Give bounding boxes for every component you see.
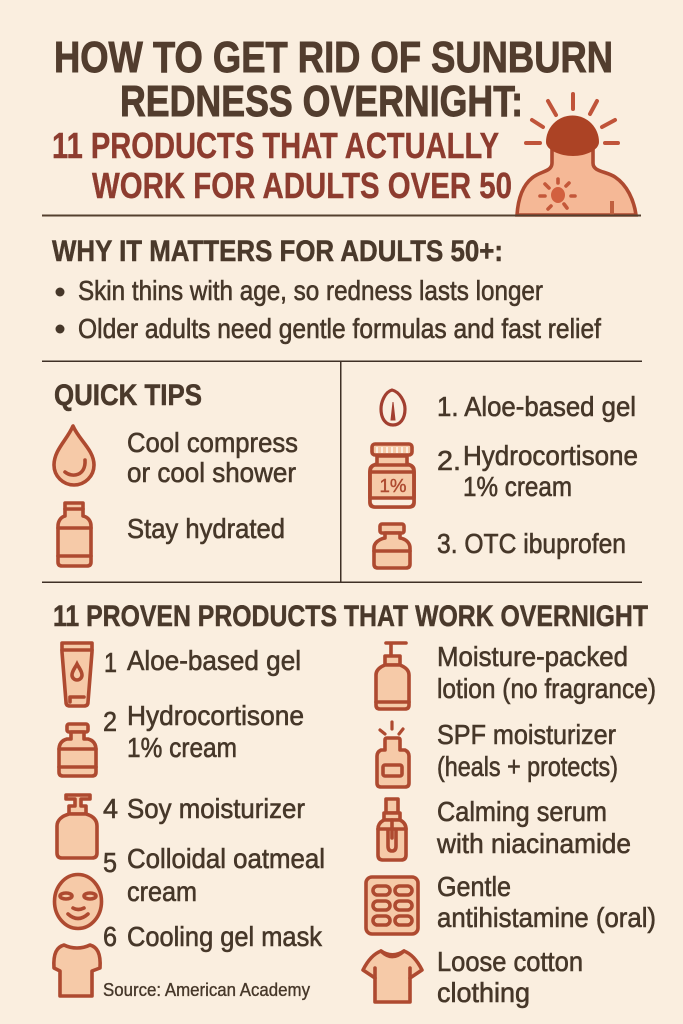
panel: products left column: 1% cream bbox=[127, 732, 237, 763]
panel: products right column: lotion (no fragrance) bbox=[437, 673, 656, 704]
header rule bbox=[42, 214, 641, 216]
panel: quick tips bbox=[54, 379, 298, 566]
panel: products left column: Colloidal oatmeal bbox=[127, 843, 325, 874]
icon: cream jar bbox=[59, 724, 96, 776]
panel: products left column: cream bbox=[127, 876, 197, 907]
icon: water drop bbox=[54, 426, 94, 485]
panel: products right column: Moisture-packed bbox=[437, 641, 628, 672]
panel: products left column: Cooling gel mask bbox=[127, 921, 323, 952]
panel: products right column: (heals + protects) bbox=[437, 751, 618, 782]
panel: products left column: Aloe-based gel bbox=[127, 645, 301, 676]
panel: top three products: 1. Aloe-based gel bbox=[437, 391, 636, 422]
source note: Source: American Academy bbox=[103, 980, 310, 1000]
panel: top three products: 1% cream bbox=[463, 471, 572, 502]
panel: top three products bbox=[370, 390, 638, 568]
panel: products left column: Soy moisturizer bbox=[127, 793, 305, 824]
icon: 1% cream jar: 1% bbox=[380, 476, 406, 496]
panel: top three products: 2. bbox=[437, 445, 461, 476]
icon: aloe tube bbox=[62, 643, 92, 706]
icon: serum bottle bbox=[378, 799, 406, 860]
icon: t-shirt bbox=[54, 945, 100, 996]
panel: products right column: SPF moisturizer bbox=[437, 719, 616, 750]
panel: top three products: Hydrocortisone bbox=[463, 440, 638, 471]
panel: products left column: 5 bbox=[103, 847, 117, 878]
panel: products right column: Loose cotton bbox=[437, 946, 583, 977]
panel: products left column: 2 bbox=[103, 706, 117, 737]
title: REDNESS OVERNIGHT: bbox=[120, 77, 523, 126]
icon: sunburned person bbox=[517, 94, 636, 215]
subtitle: 11 PRODUCTS THAT ACTUALLY bbox=[52, 125, 499, 166]
icon: SPF bottle bbox=[377, 722, 409, 787]
panel: quick tips: or cool shower bbox=[127, 457, 296, 488]
icon: 1% cream jar bbox=[370, 444, 414, 507]
panel: products right column: antihistamine (oral) bbox=[437, 902, 656, 933]
section: why it matters bbox=[52, 235, 601, 344]
panel: products left column: 6 bbox=[103, 921, 117, 952]
icon: aloe leaf bbox=[381, 390, 405, 425]
panel: products right column: clothing bbox=[437, 977, 530, 1008]
icon: blister pack bbox=[366, 877, 418, 934]
panel: products right column: with niacinamide bbox=[436, 828, 631, 859]
icon: water bottle bbox=[58, 503, 91, 566]
panel: products right column: Gentle bbox=[437, 871, 511, 902]
icon: pump bottle bbox=[57, 795, 97, 858]
section: why it matters: Older adults need gentle formulas and fast relief bbox=[78, 313, 601, 344]
subtitle: WORK FOR ADULTS OVER 50 bbox=[92, 165, 512, 206]
panel: top three products: 3. OTC ibuprofen bbox=[437, 528, 626, 559]
panel: quick tips: Stay hydrated bbox=[127, 513, 285, 544]
icon: cotton shirt bbox=[363, 951, 422, 1002]
icon: face mask bbox=[54, 874, 102, 928]
panel: products left column bbox=[54, 643, 325, 1000]
section: why it matters: WHY IT MATTERS FOR ADULTS 50+: bbox=[52, 235, 503, 268]
panel: quick tips: QUICK TIPS bbox=[54, 379, 202, 412]
panel: products right column: Calming serum bbox=[437, 796, 607, 827]
icon: lotion pump bbox=[376, 643, 409, 709]
subtitle bbox=[52, 125, 512, 206]
panel: products right column bbox=[363, 641, 656, 1008]
panel: products left column: Hydrocortisone bbox=[127, 700, 304, 731]
title bbox=[54, 33, 613, 126]
panel: quick tips: Cool compress bbox=[127, 427, 298, 458]
section: why it matters: Skin thins with age, so redness lasts longer bbox=[78, 275, 543, 306]
panel: products left column: 1 bbox=[104, 647, 117, 678]
icon: ibuprofen bottle bbox=[374, 524, 410, 568]
panel: products left column: 4 bbox=[103, 793, 118, 824]
